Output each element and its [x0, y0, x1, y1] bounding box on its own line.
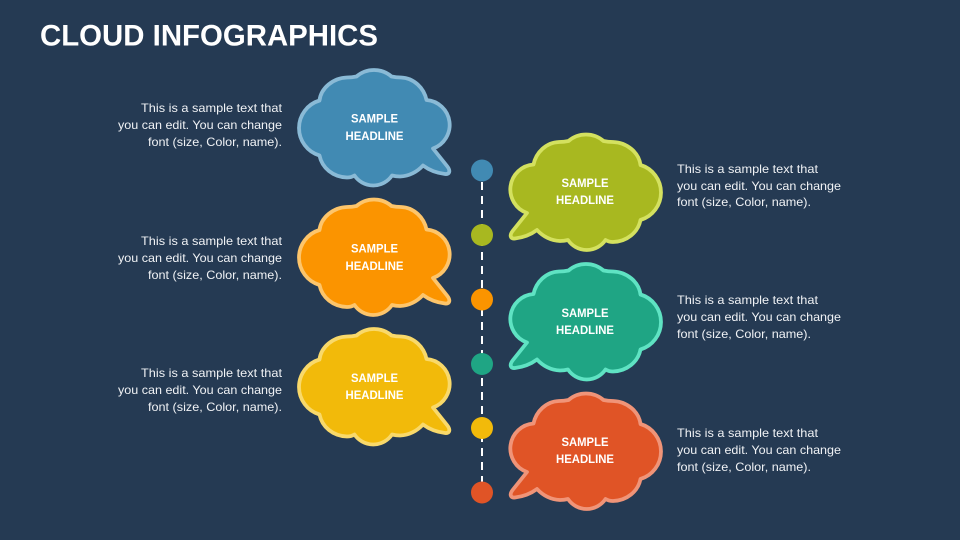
panel: green cloud — [510, 134, 661, 250]
text block: red cloud description — [677, 426, 841, 474]
panel: orange cloud — [299, 199, 450, 315]
text block: teal cloud description: font (size, Color, name). — [677, 327, 811, 341]
text block: orange cloud description: you can edit. You can change — [118, 251, 282, 265]
text block: teal cloud description — [677, 293, 841, 341]
timeline: dashed line and dots — [471, 160, 493, 504]
panel: yellow cloud — [299, 329, 450, 444]
text block: orange cloud description — [118, 234, 283, 282]
title: CLOUD INFOGRAPHICS — [40, 20, 378, 52]
text block: yellow cloud description: you can edit. You can change — [118, 383, 282, 397]
text block: green cloud description — [677, 162, 841, 209]
text block: teal cloud description: you can edit. You can change — [677, 310, 841, 324]
panel: blue cloud: HEADLINE — [346, 129, 404, 143]
panel: teal cloud — [510, 264, 661, 379]
text block: yellow cloud description: font (size, Color, name). — [148, 400, 282, 414]
text block: yellow cloud description: This is a sample text that — [141, 366, 283, 380]
panel: teal cloud: HEADLINE — [556, 323, 614, 337]
panel: red cloud: HEADLINE — [556, 452, 614, 466]
text block: orange cloud description: This is a sample text that — [141, 234, 283, 248]
text block: blue cloud description: This is a sample text that — [141, 101, 283, 115]
headline: SAMPLE — [562, 306, 608, 320]
panel: green cloud: HEADLINE — [556, 193, 614, 207]
headline: SAMPLE — [562, 176, 608, 190]
headline: SAMPLE — [351, 242, 398, 256]
panel: yellow cloud: HEADLINE — [346, 388, 404, 402]
text block: orange cloud description: font (size, Color, name). — [148, 268, 282, 282]
text block: green cloud description: you can edit. You can change — [677, 179, 841, 193]
panel: red cloud — [510, 393, 661, 509]
text block: blue cloud description — [118, 101, 283, 149]
panel: orange cloud: HEADLINE — [346, 259, 404, 273]
text block: green cloud description: This is a sample text that — [677, 162, 819, 176]
headline: SAMPLE — [562, 435, 608, 449]
text block: red cloud description: This is a sample text that — [677, 426, 819, 440]
text block: red cloud description: you can edit. You can change — [677, 443, 841, 457]
text block: green cloud description: font (size, Color, name). — [677, 195, 811, 209]
text block: blue cloud description: you can edit. You can change — [118, 118, 282, 132]
headline: SAMPLE — [351, 112, 398, 126]
text block: red cloud description: font (size, Color, name). — [677, 460, 811, 474]
text block: blue cloud description: font (size, Color, name). — [148, 135, 282, 149]
text block: yellow cloud description — [118, 366, 283, 414]
text block: teal cloud description: This is a sample text that — [677, 293, 819, 307]
headline: SAMPLE — [351, 371, 398, 385]
panel: blue cloud — [299, 70, 450, 185]
